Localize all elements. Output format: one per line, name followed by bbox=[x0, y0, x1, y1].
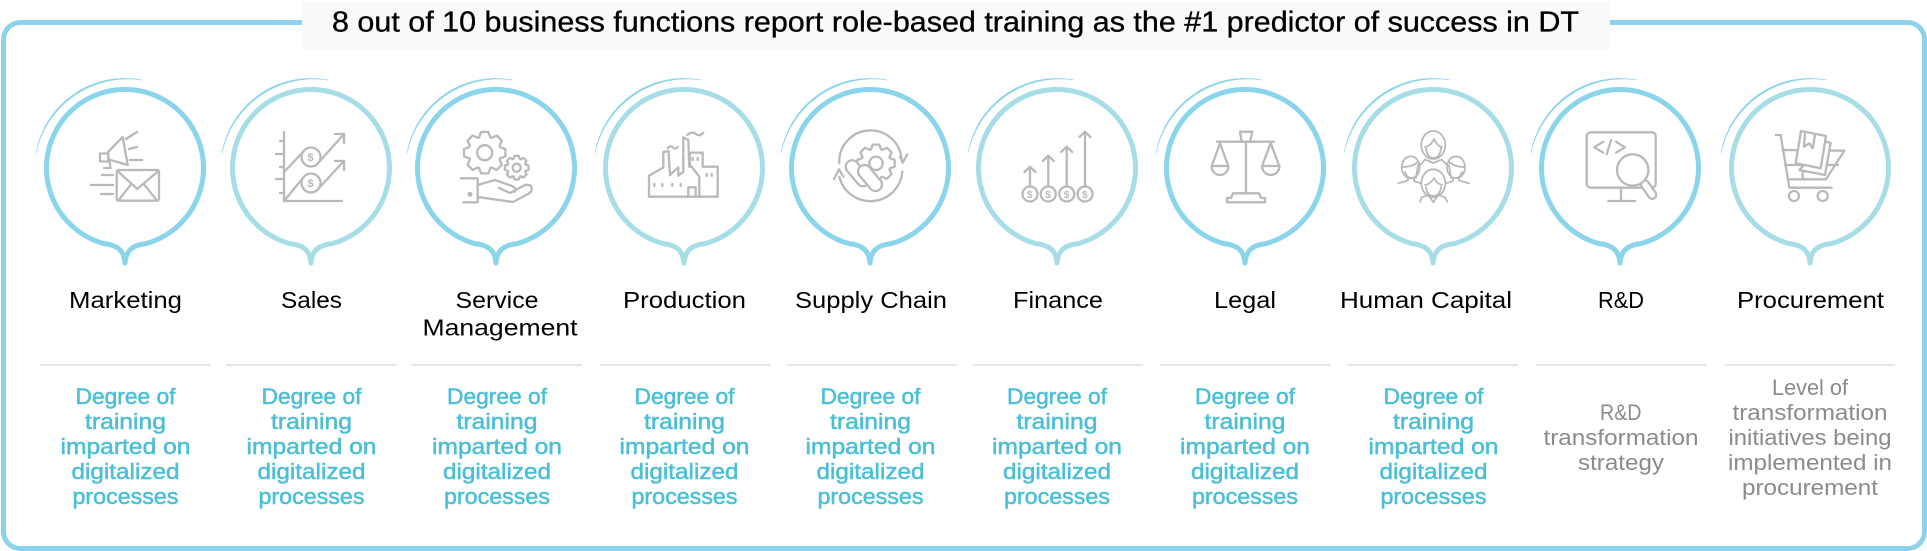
label: Service bbox=[456, 287, 538, 313]
description: processes bbox=[632, 484, 738, 509]
bubble marker bbox=[36, 78, 204, 263]
description: processes bbox=[444, 484, 550, 509]
description: processes bbox=[818, 484, 924, 509]
panel: Production bbox=[595, 78, 770, 509]
description: digitalized bbox=[443, 459, 551, 484]
description: Degree of bbox=[76, 384, 176, 409]
description: imparted on bbox=[432, 434, 562, 459]
description: digitalized bbox=[630, 459, 738, 484]
description: training bbox=[644, 409, 725, 434]
description: processes bbox=[1192, 484, 1298, 509]
description: transformation bbox=[1544, 425, 1698, 450]
bubble marker bbox=[1344, 78, 1512, 263]
description bbox=[620, 384, 750, 509]
description: imparted on bbox=[620, 434, 750, 459]
panel: Procurement bbox=[1721, 78, 1895, 500]
panel: Finance bbox=[968, 78, 1143, 509]
description: training bbox=[456, 409, 538, 434]
description: procurement bbox=[1742, 475, 1878, 500]
icon: shopping cart with books bbox=[1776, 131, 1844, 201]
panel: Human Capital bbox=[1340, 78, 1518, 509]
label: Sales bbox=[281, 287, 342, 313]
description: imparted on bbox=[806, 434, 936, 459]
description: processes bbox=[258, 484, 364, 509]
description: Degree of bbox=[634, 384, 735, 409]
description bbox=[806, 384, 936, 509]
description: digitalized bbox=[1191, 459, 1299, 484]
description: training bbox=[830, 409, 911, 434]
description: training bbox=[1204, 409, 1286, 434]
description: training bbox=[1016, 409, 1098, 434]
divider bbox=[1725, 364, 1895, 366]
description: Degree of bbox=[820, 384, 921, 409]
icon: dollar coins with rising arrows: $ bbox=[1045, 190, 1051, 201]
description: Degree of bbox=[1384, 384, 1484, 409]
label bbox=[422, 287, 578, 340]
description bbox=[1368, 384, 1498, 509]
divider bbox=[973, 364, 1143, 366]
bubble marker bbox=[1156, 78, 1324, 263]
bubble marker bbox=[222, 78, 390, 263]
description bbox=[1544, 400, 1698, 475]
icon: rising dollar chart: $ bbox=[308, 178, 314, 190]
description bbox=[60, 384, 190, 509]
label: Procurement bbox=[1737, 287, 1885, 313]
description: digitalized bbox=[72, 459, 180, 484]
divider bbox=[1536, 364, 1706, 366]
icon: scales of justice bbox=[1212, 132, 1280, 202]
description: digitalized bbox=[258, 459, 366, 484]
description: digitalized bbox=[1003, 459, 1111, 484]
panel: Legal bbox=[1156, 78, 1330, 509]
description: imparted on bbox=[60, 434, 190, 459]
description: training bbox=[1393, 409, 1474, 434]
description bbox=[1728, 375, 1892, 500]
panel: R&D bbox=[1531, 78, 1706, 475]
description: digitalized bbox=[1380, 459, 1488, 484]
bubble marker bbox=[781, 78, 948, 263]
icon: dollar coins with rising arrows: $ bbox=[1082, 190, 1088, 201]
description: Degree of bbox=[1007, 384, 1108, 409]
title: 8 out of 10 business functions report role-based training as the #1 predictor of success in DT bbox=[332, 6, 1579, 38]
label: Human Capital bbox=[1340, 287, 1512, 313]
description: imparted on bbox=[1180, 434, 1310, 459]
label: Supply Chain bbox=[795, 287, 947, 313]
description: training bbox=[85, 409, 166, 434]
divider bbox=[1348, 364, 1518, 366]
description: implemented in bbox=[1728, 450, 1892, 475]
description bbox=[432, 384, 562, 509]
icon: megaphone and envelope bbox=[91, 132, 159, 201]
divider bbox=[412, 364, 582, 366]
description: Level of bbox=[1772, 375, 1849, 400]
icon: gear, chain and cycle arrows bbox=[834, 130, 907, 201]
description: digitalized bbox=[816, 459, 924, 484]
description: transformation bbox=[1732, 400, 1888, 425]
icon: dollar coins with rising arrows: $ bbox=[1064, 190, 1070, 201]
description: processes bbox=[72, 484, 178, 509]
description: initiatives being bbox=[1728, 425, 1892, 450]
description: R&D bbox=[1600, 400, 1642, 425]
divider bbox=[1160, 364, 1330, 366]
label: Finance bbox=[1013, 287, 1103, 313]
description: imparted on bbox=[246, 434, 376, 459]
description: Degree of bbox=[447, 384, 548, 409]
divider bbox=[600, 364, 770, 366]
bubble marker bbox=[1531, 78, 1698, 263]
description: training bbox=[271, 409, 352, 434]
icon: dollar coins with rising arrows bbox=[1022, 132, 1092, 202]
icon: rising dollar chart bbox=[276, 132, 344, 201]
description: processes bbox=[1380, 484, 1486, 509]
label: Management bbox=[422, 314, 578, 340]
bubble marker bbox=[595, 78, 762, 263]
icon: rising dollar chart: $ bbox=[308, 152, 314, 164]
description: imparted on bbox=[1368, 434, 1498, 459]
icon: dollar coins with rising arrows: $ bbox=[1027, 190, 1033, 201]
description bbox=[246, 384, 376, 509]
icon: factory bbox=[649, 133, 718, 197]
divider bbox=[226, 364, 396, 366]
label: R&D bbox=[1598, 287, 1644, 313]
label: Legal bbox=[1214, 287, 1276, 313]
panel: Sales bbox=[222, 78, 396, 509]
divider bbox=[40, 364, 210, 366]
label: Marketing bbox=[69, 287, 182, 313]
icon: gears on hand bbox=[461, 132, 532, 202]
bubble marker bbox=[968, 78, 1136, 263]
label: Production bbox=[623, 287, 746, 313]
description: Degree of bbox=[262, 384, 362, 409]
icon: group of people bbox=[1398, 131, 1469, 202]
bubble marker bbox=[1721, 78, 1888, 263]
description: Degree of bbox=[1195, 384, 1296, 409]
description: processes bbox=[1004, 484, 1110, 509]
icon: monitor with code and magnifier bbox=[1587, 132, 1658, 201]
title bbox=[302, 2, 1610, 50]
description: imparted on bbox=[992, 434, 1122, 459]
panel: Marketing bbox=[36, 78, 210, 509]
description bbox=[1180, 384, 1310, 509]
description bbox=[992, 384, 1122, 509]
panel: Service Management bbox=[407, 78, 582, 509]
bubble marker bbox=[407, 78, 574, 263]
description: strategy bbox=[1578, 450, 1664, 475]
divider bbox=[787, 364, 957, 366]
panel: Supply Chain bbox=[781, 78, 957, 509]
